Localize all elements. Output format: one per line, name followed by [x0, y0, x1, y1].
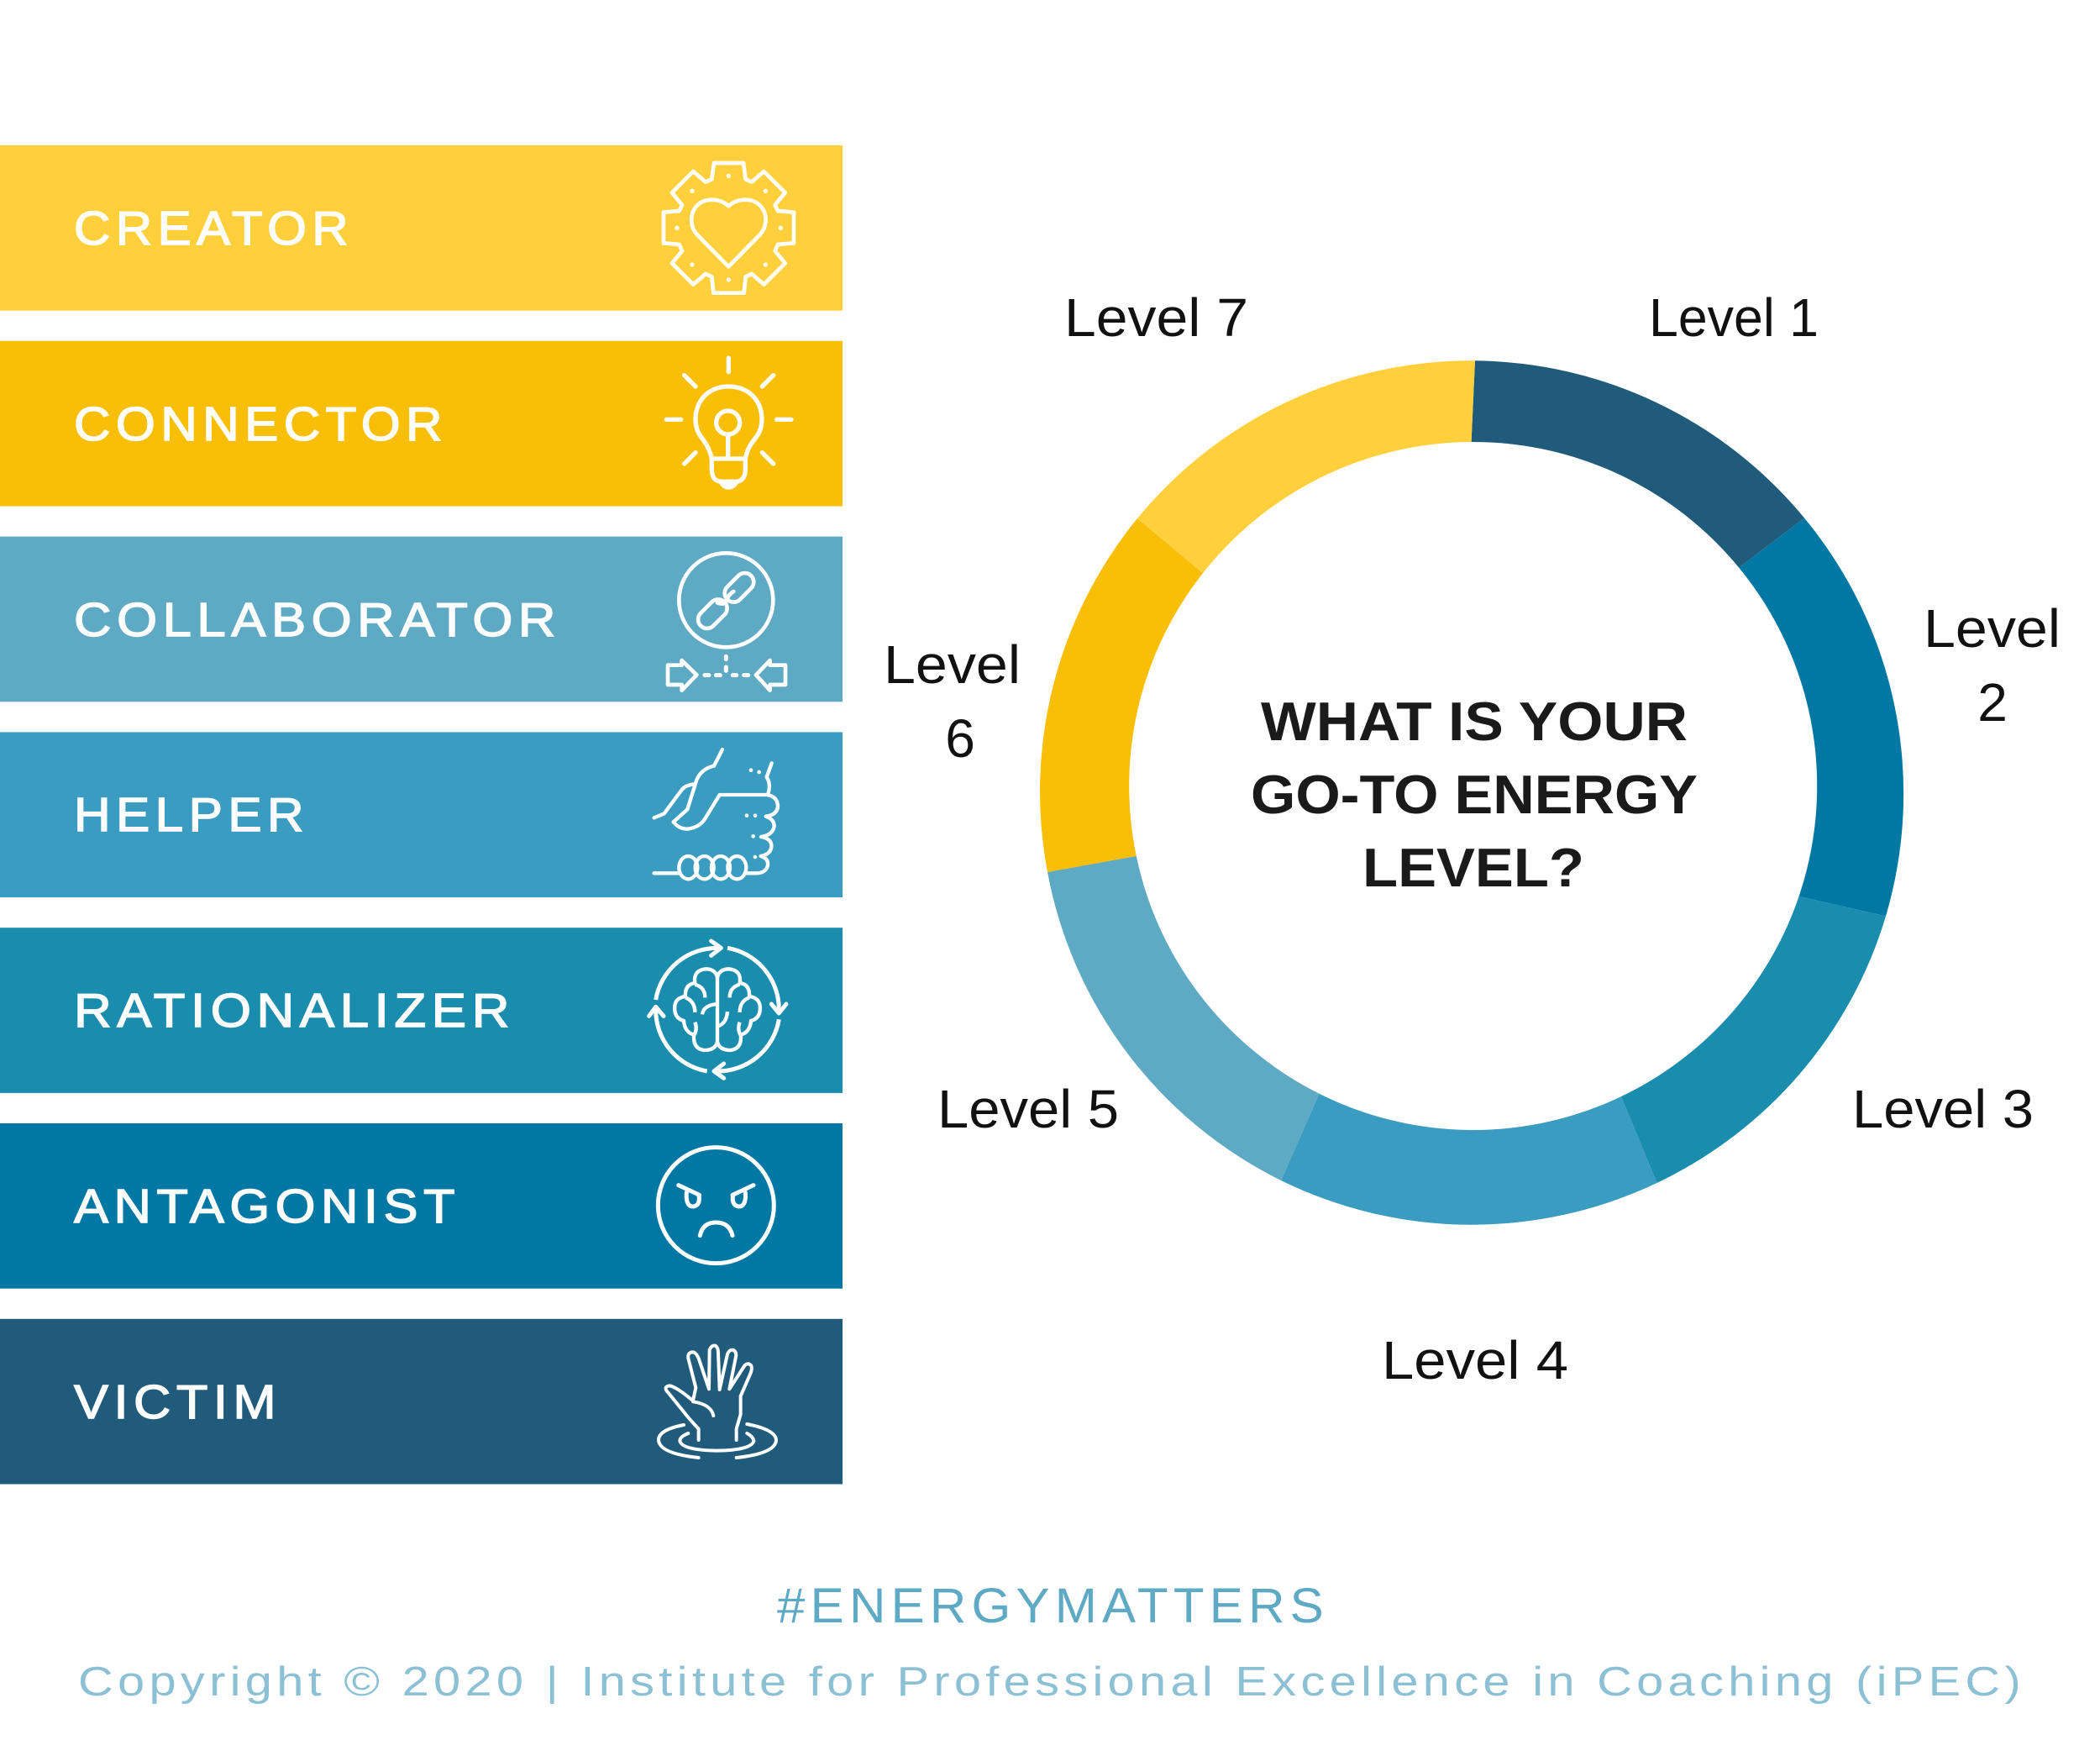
label: collaborator: COLLABORATOR	[74, 593, 561, 647]
label: helper: HELPER	[74, 788, 309, 842]
icon: gear with heart	[664, 163, 794, 293]
hashtag: #ENERGYMATTERS	[777, 1579, 1329, 1633]
chart label: level 3: Level 3	[1852, 1079, 2034, 1139]
segment: level 7	[1137, 360, 1475, 786]
segment: level 5	[1047, 786, 1472, 1180]
label: connector: CONNECTOR	[74, 397, 448, 451]
icon: sinking hand	[659, 1346, 776, 1458]
panel: antagonist	[0, 1123, 843, 1289]
chart label: level 6: 6	[945, 708, 975, 769]
label: rationalizer: RATIONALIZER	[74, 984, 515, 1038]
center question: LEVEL?	[1362, 837, 1584, 898]
panel: creator	[0, 145, 843, 311]
segment: level 4	[1281, 786, 1656, 1225]
panel: helper	[0, 732, 843, 897]
label: victim: VICTIM	[74, 1375, 281, 1429]
label: creator: CREATOR	[74, 202, 354, 255]
panel: victim	[0, 1319, 843, 1484]
chart label: level 4: Level 4	[1382, 1330, 1568, 1390]
panel: connector	[0, 341, 843, 506]
chart label: level 2	[1924, 598, 2061, 733]
icon: chain link with arrows	[668, 553, 785, 691]
segment: level 1	[1469, 360, 1804, 786]
chart label: level 2: 2	[1977, 672, 2008, 733]
label: antagonist: ANTAGONIST	[74, 1180, 460, 1233]
icon: light bulb	[666, 358, 791, 490]
icon: angry face	[658, 1148, 774, 1264]
copyright line: Copyright © 2020 | Institute for Professional Excellence in Coaching (iPEC)	[78, 1659, 2025, 1705]
chart label: level 7: Level 7	[1064, 287, 1248, 348]
center question: WHAT IS YOUR	[1261, 691, 1688, 752]
chart label: level 2: Level	[1924, 598, 2061, 659]
chart label: level 1: Level 1	[1649, 287, 1819, 348]
segment: level 6	[1040, 518, 1472, 872]
donut hole	[1129, 442, 1817, 1130]
icon: helping hands	[654, 749, 778, 879]
center question: GO-TO ENERGY	[1251, 764, 1698, 825]
segment: level 3	[1472, 786, 1886, 1183]
segment: level 2	[1472, 518, 1903, 916]
panel: rationalizer	[0, 928, 843, 1093]
panel: collaborator	[0, 537, 843, 702]
center question	[1251, 691, 1698, 898]
donut chart: energy levels	[1040, 360, 1903, 1225]
chart label: level 5: Level 5	[937, 1079, 1119, 1139]
icon: brain with cycle arrows	[649, 941, 786, 1078]
chart label: level 6	[884, 634, 1021, 769]
chart label: level 6: Level	[884, 634, 1021, 695]
